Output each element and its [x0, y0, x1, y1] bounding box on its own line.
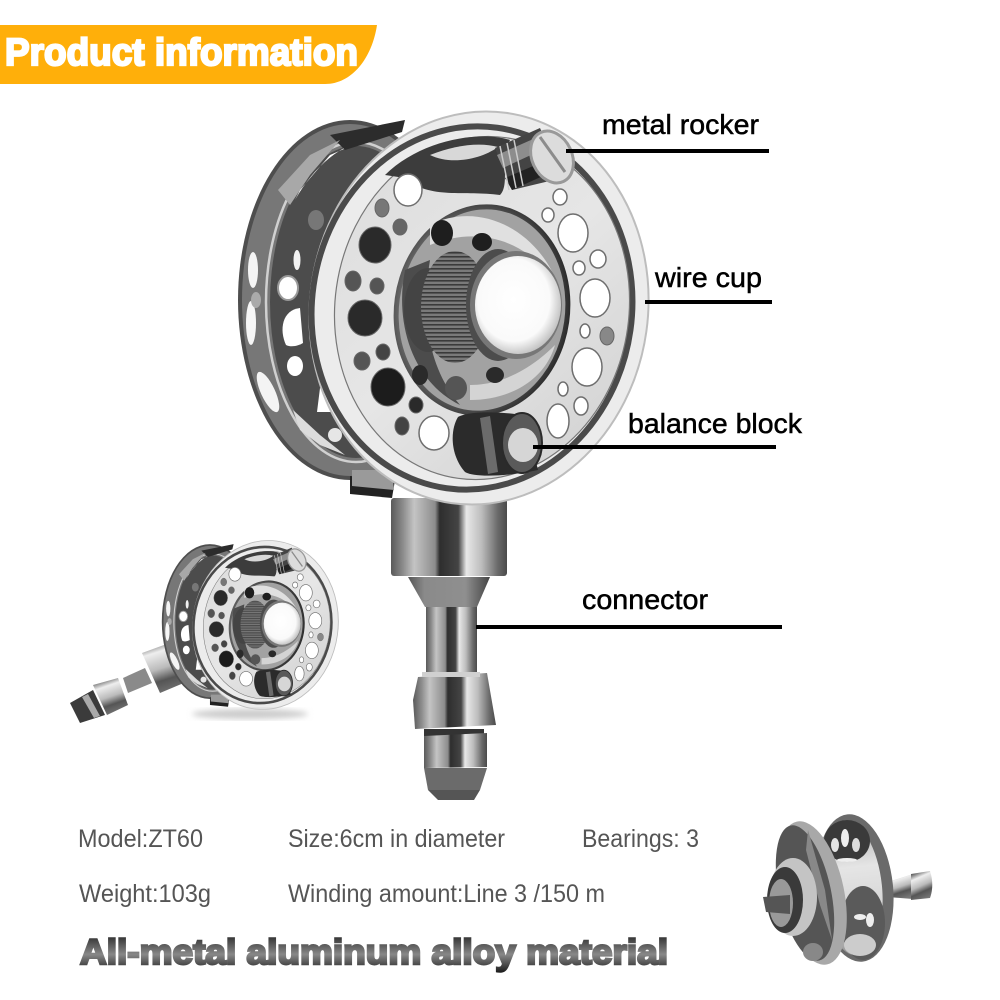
- side view front disc: [766, 815, 858, 971]
- specifications: Weight:103g: [79, 880, 211, 908]
- label: connector: [476, 584, 782, 629]
- specifications: Size:6cm in diameter: [288, 825, 505, 853]
- label: metal rocker: metal rocker: [602, 109, 759, 140]
- inset reel view: [70, 531, 349, 723]
- specifications: Winding amount:Line 3 /150 m: [288, 880, 605, 908]
- callout lines and labels: [476, 109, 803, 629]
- banner: [0, 25, 377, 84]
- specifications: [78, 825, 699, 908]
- label: balance block: balance block: [628, 408, 803, 439]
- main reel: [238, 89, 674, 800]
- side view handle: [888, 871, 932, 900]
- label: wire cup: wire cup: [654, 262, 762, 293]
- slogan: All-metal aluminum alloy material: [80, 933, 668, 972]
- specifications: Model:ZT60: [78, 825, 203, 853]
- side view rear disc: [809, 810, 901, 966]
- inset reflection: [192, 709, 308, 719]
- label: wire cup: [645, 262, 772, 304]
- label: balance block: [533, 408, 803, 449]
- label: metal rocker: [566, 109, 769, 153]
- side view reel: [763, 810, 932, 971]
- banner title: Product information: [5, 32, 358, 74]
- label: connector: connector: [582, 584, 708, 615]
- inset handle stem: [70, 638, 198, 723]
- specifications: Bearings: 3: [582, 825, 699, 853]
- connector stem: [391, 498, 507, 800]
